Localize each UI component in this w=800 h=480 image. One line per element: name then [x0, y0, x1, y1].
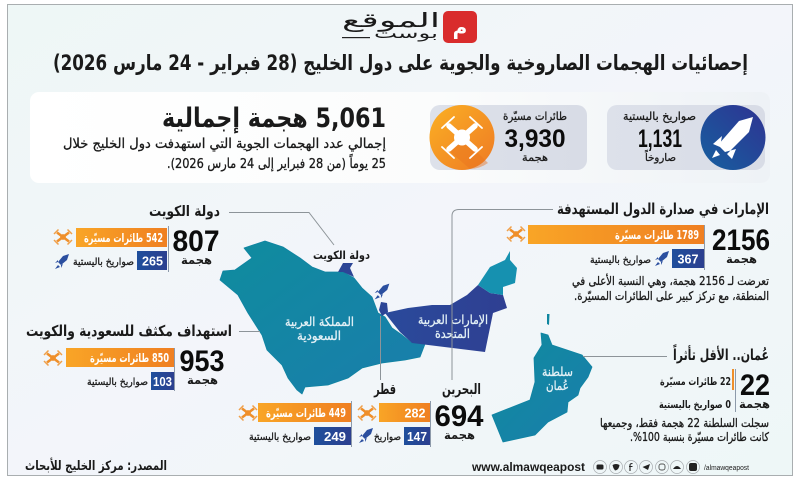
missile bar: UAE	[590, 249, 704, 268]
logo: م	[453, 15, 467, 39]
unit: Oman: هجمة	[739, 397, 770, 411]
description: UAE: المنطقة، مع تركز كبير على الطائرات المسيّرة.	[574, 289, 769, 304]
missile bar: Bahrain	[374, 427, 430, 445]
drone bar: Qatar: 449 طائرات مسيّرة	[266, 406, 346, 420]
label: Oman	[542, 364, 573, 393]
icon: missile Kuwait	[55, 254, 69, 269]
stat: Oman drones: 22 طائرات مسيّرة	[660, 376, 731, 388]
heading: Qatar: قطر	[373, 382, 396, 398]
stat: drones: 3,930	[504, 125, 566, 153]
unit: Saudi: هجمة	[187, 373, 218, 387]
label: Saudi Arabia: السعودية	[297, 328, 341, 344]
missile bar: Kuwait	[73, 251, 167, 270]
logo: بوست	[374, 26, 438, 42]
total headline: 5,061 هجمة إجمالية	[162, 103, 386, 134]
drone bar: UAE: 1789 طائرات مسيّرة	[615, 228, 699, 242]
drone bar: Saudi	[66, 348, 174, 367]
label: Saudi Arabia: المملكة العربية	[285, 314, 354, 330]
website: www.almawqeapost	[471, 462, 585, 474]
drone bar: UAE	[528, 225, 704, 244]
stat: ballistic missiles: 1,131	[638, 125, 682, 153]
panel: Saudi and Kuwait	[26, 322, 232, 391]
stat: drones: هجمة	[522, 152, 548, 164]
label: Kuwait: دولة الكويت	[313, 248, 370, 263]
icon: drone Bahrain	[358, 406, 376, 420]
missile bar: UAE: صواريخ باليستية	[590, 255, 651, 266]
total: UAE: 2156	[712, 224, 770, 257]
total: Bahrain: 694	[434, 400, 484, 433]
drone bar: Saudi: 850 طائرات مسيّرة	[90, 351, 169, 365]
map: Musandam	[547, 314, 550, 325]
logo	[342, 8, 477, 43]
stat: drones: طائرات مسيّرة	[503, 109, 567, 124]
panel: UAE	[507, 200, 770, 304]
missile bar: Kuwait: 265	[142, 254, 163, 268]
drone bar: Kuwait	[76, 228, 167, 247]
stat: ballistic missiles: صاروخاً	[645, 150, 676, 164]
icon: drone Qatar	[239, 406, 257, 420]
icon: drone Saudi	[44, 350, 62, 366]
missile bar: Bahrain: 147	[407, 429, 427, 444]
icon: missile Bahrain	[359, 428, 373, 443]
total: Oman: 22	[740, 369, 770, 402]
missile bar: Bahrain: صواريخ	[374, 432, 401, 443]
heading: Bahrain: البحرين	[442, 382, 481, 398]
icon: drone Kuwait	[54, 230, 72, 244]
missile bar: Kuwait: صواريخ باليستية	[73, 257, 134, 268]
description: Oman: كانت طائرات مسيّرة بنسبة 100%.	[630, 430, 769, 445]
label: UAE: الإمارات العربية	[418, 312, 488, 328]
total description: إجمالي عدد الهجمات الجوية التي استهدفت دول الخليج خلال	[63, 136, 386, 152]
connector lines	[229, 210, 667, 380]
missile bar: Qatar: صواريخ باليستية	[249, 432, 311, 443]
total: Saudi: 953	[180, 345, 224, 378]
map: Saudi Arabia	[220, 241, 425, 394]
map: Oman	[492, 333, 592, 442]
drone bar: Bahrain: 282	[404, 406, 426, 420]
missile bar: UAE: 367	[678, 252, 698, 266]
map: Bahrain and Qatar	[379, 302, 388, 316]
stat: ballistic missiles	[607, 105, 766, 170]
social icons	[594, 460, 700, 474]
label: UAE	[418, 312, 488, 341]
missile bar: Saudi	[87, 372, 174, 390]
missile bar: Saudi: 103	[153, 374, 172, 389]
map: Kuwait	[338, 263, 354, 277]
drone bar: Qatar	[258, 403, 351, 422]
description: UAE: تعرضت لـ 2156 هجمة، وهي النسبة الأعلى في	[572, 273, 769, 289]
panel: Qatar	[239, 382, 396, 447]
description: UAE	[572, 273, 769, 304]
stat: Oman missiles: 0 صواريخ باليستية	[659, 399, 731, 411]
total description	[63, 136, 386, 172]
description: Oman: سجلت السلطنة 22 هجمة فقط، وجميعها	[600, 416, 769, 431]
label: Oman: سلطنة	[542, 364, 573, 379]
map: Gulf states	[220, 241, 592, 442]
heading: Kuwait: دولة الكويت	[149, 204, 220, 220]
drone bar: Kuwait: 542 طائرات مسيّرة	[84, 231, 163, 245]
stat: ballistic missiles: صواريخ باليستية	[623, 109, 696, 124]
description: Oman	[600, 416, 769, 445]
panel: Kuwait	[54, 204, 220, 272]
map: UAE	[385, 285, 507, 352]
label: Saudi Arabia	[285, 314, 354, 344]
unit: Bahrain: هجمة	[444, 428, 475, 442]
stat: drones	[430, 105, 587, 170]
panel: Bahrain	[358, 382, 484, 447]
logo: الموقع	[342, 8, 440, 32]
unit: Kuwait: هجمة	[181, 253, 212, 267]
label: UAE: المتحدة	[435, 326, 470, 341]
social handle: /almawqeapost	[704, 465, 749, 472]
unit: UAE: هجمة	[726, 252, 757, 266]
missile bar: Qatar	[249, 427, 351, 445]
heading: Saudi and Kuwait: استهداف مكثف للسعودية والكويت	[26, 322, 232, 340]
icon: rocket over Gulf	[375, 284, 389, 299]
map: northern emirates	[478, 251, 517, 295]
icon: missile UAE	[655, 251, 669, 266]
label: Oman: عُمان	[546, 378, 569, 393]
panel: total attacks summary	[30, 92, 770, 183]
total: Kuwait: 807	[172, 225, 220, 258]
icon: drone UAE	[507, 226, 525, 242]
panel: Oman	[600, 344, 770, 445]
missile bar: Qatar: 249	[324, 429, 346, 444]
missile bar: Saudi: صواريخ باليستية	[87, 377, 148, 388]
total description: 25 يوماً (من 28 فبراير إلى 24 مارس 2026).	[167, 153, 386, 172]
source: المصدر: مركز الخليج للأبحاث	[25, 457, 167, 474]
